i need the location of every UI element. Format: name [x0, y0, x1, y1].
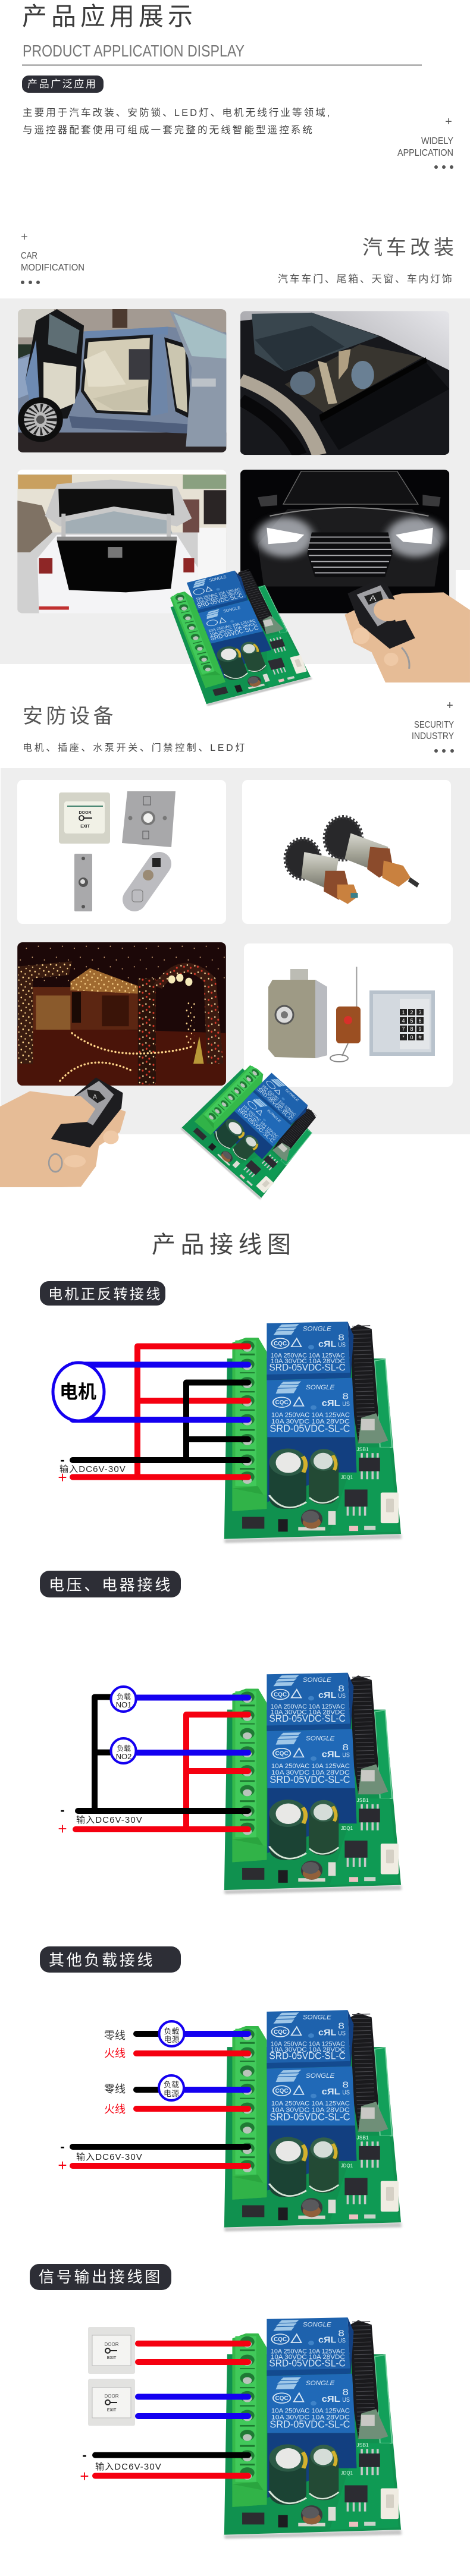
- board: SRD-05VDC-SL-C: [269, 1713, 346, 1724]
- labels: neutral and live: 零线: [104, 2083, 126, 2095]
- board: 10A 250VAC 10A 125VAC: [271, 2040, 345, 2047]
- board: 10A 250VAC 10A 125VAC: [271, 1411, 350, 1418]
- product board: section two: 10A 30VDC 10A 28VDC: [240, 1106, 277, 1141]
- wires: [76, 1697, 248, 1829]
- title: 产品应用展示: [22, 2, 197, 30]
- board: 8: [342, 1392, 349, 1401]
- board: 10A 250VAC 10A 125VAC: [271, 1702, 345, 1710]
- icon: white door exit button: [59, 792, 110, 844]
- load source 1: [159, 2021, 184, 2046]
- icon: white door exit button: DOOR: [79, 811, 92, 815]
- heading: car modification: 汽车车门、尾箱、天窗、车内灯饰: [278, 273, 453, 285]
- board: 8: [342, 1743, 349, 1752]
- icon: door exit switch 2: DOOR: [105, 2393, 119, 2399]
- board: cЯL: [318, 2027, 336, 2037]
- power input label: [58, 2139, 143, 2174]
- icon: access keypad: 1: [402, 1009, 405, 1015]
- board: [224, 2010, 402, 2231]
- board: SRD-05VDC-SL-C: [269, 2358, 346, 2369]
- board: US: [342, 2089, 350, 2096]
- photo: car trunk: [17, 470, 226, 614]
- power input label: [58, 1452, 126, 1486]
- power input label: +: [58, 1468, 67, 1486]
- power input label: +: [80, 2467, 89, 2485]
- icon: door exit switch 2: EXIT: [107, 2408, 117, 2413]
- photo: holiday lights house: [17, 942, 226, 1086]
- icon: wireless remote: [330, 967, 361, 1062]
- board: [224, 2317, 402, 2539]
- icon: door exit switch 1: [88, 2327, 135, 2374]
- load source 2: [159, 2075, 184, 2100]
- board: US: [338, 2029, 346, 2037]
- board: JSB1: [357, 1446, 369, 1452]
- board: CQC: [275, 1399, 289, 1406]
- wiring scheme: motor forward and reverse: [40, 1281, 402, 1543]
- power input label: -: [60, 1452, 65, 1467]
- board: SRD-05VDC-SL-C: [270, 2111, 350, 2123]
- power input label: 输入DC6V-30V: [76, 2152, 143, 2162]
- icon: white door exit button: EXIT: [80, 825, 90, 829]
- labels: neutral and live: 火线: [104, 2047, 126, 2059]
- wiring scheme: voltage and appliance: [40, 1571, 402, 1894]
- wires: [95, 2344, 248, 2476]
- board: JSB1: [357, 1798, 369, 1803]
- icon: access keypad: 5: [410, 1018, 413, 1024]
- pill: signal output wiring: [30, 2264, 171, 2290]
- board: US: [338, 2336, 346, 2344]
- panel: security background: [1, 768, 470, 1134]
- icon: electric lock: [268, 969, 327, 1058]
- heading: car modification: 汽车改装: [362, 237, 458, 259]
- tag: car modification: CAR: [21, 251, 37, 261]
- icon: access keypad: 6: [418, 1018, 422, 1024]
- hand holding remote: section two: A: [93, 1093, 98, 1100]
- tag: car modification: [21, 231, 84, 284]
- board: US: [342, 1751, 350, 1759]
- tag: widely application: +: [445, 115, 452, 128]
- board: CQC: [275, 2395, 289, 2402]
- board: 10A 30VDC 10A 28VDC: [271, 2413, 350, 2421]
- board: CQC: [274, 1691, 287, 1698]
- tag: widely application: APPLICATION: [397, 148, 453, 158]
- tag: security industry: SECURITY: [414, 720, 454, 730]
- pill: motor wiring: [40, 1281, 165, 1306]
- product board: section one: SONGLE: [208, 574, 227, 583]
- icon: armature back: [325, 817, 418, 887]
- text block: intro: 主要用于汽车改装、安防锁、LED灯、电机无线行业等领域,: [23, 107, 331, 118]
- product board: section one: 10A 250VAC 10A 125VAC: [195, 587, 241, 601]
- board: cЯL: [322, 1398, 340, 1408]
- hand holding remote: section one: A: [369, 595, 377, 603]
- motor symbol: 电机: [59, 1382, 96, 1402]
- board: JSB1: [357, 2442, 369, 2448]
- text block: intro: [23, 107, 331, 136]
- icon: steel exit plate: [122, 791, 176, 847]
- board: SRD-05VDC-SL-C: [269, 2050, 346, 2062]
- icon: access keypad: #: [418, 1034, 422, 1040]
- board: 10A 30VDC 10A 28VDC: [271, 2353, 345, 2360]
- board: 8: [338, 1333, 344, 1342]
- board: CQC: [275, 1750, 289, 1757]
- board: SONGLE: [303, 2320, 332, 2328]
- board: 10A 30VDC 10A 28VDC: [271, 1769, 350, 1776]
- icon: door exit switch 1: DOOR: [105, 2342, 119, 2347]
- board: [224, 1673, 402, 1894]
- board: cЯL: [318, 1339, 336, 1349]
- pill: voltage wiring: 电压、电器接线: [49, 1576, 173, 1594]
- photo: open car doors: [18, 309, 226, 452]
- board: 10A 250VAC 10A 125VAC: [271, 2347, 345, 2355]
- pill: voltage wiring: [40, 1571, 181, 1597]
- product board: section two: SRD-05VDC-SL-C: [256, 1087, 293, 1122]
- icon: oval exit button: [132, 858, 161, 902]
- card: motor armatures: [242, 780, 451, 924]
- product board: section one: 10A 250VAC 10A 125VAC: [208, 618, 256, 633]
- load NO2: NO2: [116, 1752, 131, 1761]
- board: JDQ1: [341, 1475, 353, 1480]
- pill: wide application: 产品广泛应用: [27, 78, 98, 90]
- wiring scheme: other loads: [40, 1946, 402, 2231]
- power input label: -: [60, 2139, 65, 2154]
- heading: car modification: [278, 237, 458, 285]
- labels: neutral and live: 火线: [104, 2103, 126, 2115]
- board: JSB1: [357, 2135, 369, 2141]
- power input label: +: [58, 1820, 67, 1838]
- board: US: [342, 2396, 350, 2403]
- board: SONGLE: [306, 1383, 335, 1391]
- card: door exit switches: [17, 780, 226, 924]
- icon: access keypad: *: [402, 1034, 405, 1040]
- board: cЯL: [318, 2335, 336, 2345]
- photo: car headlights: [240, 470, 449, 614]
- board: CQC: [274, 1340, 287, 1347]
- product board: section two: 10A 250VAC 10A 125VAC: [242, 1104, 280, 1138]
- tag: widely application: [397, 115, 453, 169]
- board: US: [342, 1400, 350, 1407]
- icon: door exit switch 1: EXIT: [107, 2356, 117, 2360]
- wires: [73, 2034, 248, 2166]
- load NO1: [111, 1687, 136, 1712]
- heading: wiring diagram: 产品接线图: [152, 1232, 296, 1258]
- power input label: +: [58, 2156, 67, 2174]
- product board: section one: 10A 30VDC 10A 28VDC: [209, 621, 258, 637]
- board: 10A 30VDC 10A 28VDC: [271, 1357, 345, 1364]
- product board: section two: SONGLE: [267, 1109, 282, 1124]
- board: JDQ1: [341, 2471, 353, 2476]
- board: SONGLE: [303, 1325, 332, 1332]
- board: cЯL: [322, 1750, 340, 1759]
- board: 10A 250VAC 10A 125VAC: [271, 2099, 350, 2107]
- heading: security equipment: 安防设备: [23, 705, 117, 728]
- tag: car modification: MODIFICATION: [21, 263, 84, 273]
- board: 10A 30VDC 10A 28VDC: [271, 1708, 345, 1716]
- photo: sunroof: [240, 311, 449, 455]
- pill: signal output wiring: 信号输出接线图: [39, 2268, 162, 2286]
- tag: security industry: +: [446, 699, 453, 712]
- icon: armature front: [286, 839, 358, 904]
- english subtitle: PRODUCT APPLICATION DISPLAY: [23, 42, 245, 60]
- board: SRD-05VDC-SL-C: [270, 2418, 350, 2430]
- board: cЯL: [322, 2394, 340, 2404]
- board: JDQ1: [341, 1826, 353, 1832]
- pill: motor wiring: 电机正反转接线: [48, 1287, 162, 1303]
- board: 8: [338, 1684, 344, 1693]
- product board: section one: [161, 563, 313, 706]
- product board: section two: 10A 30VDC 10A 28VDC: [259, 1086, 295, 1118]
- board: 8: [342, 2080, 349, 2090]
- hand holding remote: section two: [0, 1077, 126, 1188]
- product board: section two: SRD-05VDC-SL-C: [236, 1108, 275, 1144]
- load source 1: 负载: [164, 2027, 180, 2036]
- board: SONGLE: [303, 2013, 332, 2021]
- icon: narrow exit plate: [74, 854, 92, 911]
- board: 10A 30VDC 10A 28VDC: [271, 1417, 350, 1425]
- product board: section one: SONGLE: [223, 605, 242, 614]
- motor symbol: [53, 1363, 104, 1421]
- power input label: -: [82, 2448, 87, 2462]
- board: SONGLE: [306, 2379, 335, 2386]
- board: 10A 30VDC 10A 28VDC: [271, 2106, 350, 2113]
- wires: [73, 1346, 248, 1477]
- icon: access keypad: 8: [410, 1026, 413, 1032]
- board: CQC: [274, 2336, 287, 2343]
- product board: section one: 10A 30VDC 10A 28VDC: [196, 590, 242, 605]
- load source 2: 负载: [164, 2080, 179, 2089]
- power input label: 输入DC6V-30V: [95, 2462, 162, 2472]
- power input label: 输入DC6V-30V: [76, 1815, 143, 1825]
- heading: security equipment: [23, 705, 247, 753]
- photos: car modification: [17, 309, 449, 614]
- tag: security industry: INDUSTRY: [412, 731, 454, 741]
- board: SRD-05VDC-SL-C: [269, 1362, 346, 1373]
- product board: section two: [180, 1055, 331, 1201]
- board: SONGLE: [306, 1734, 335, 1742]
- icon: access keypad: 7: [402, 1026, 405, 1032]
- icon: access keypad: [369, 990, 435, 1056]
- load NO1: 负载: [117, 1693, 131, 1701]
- board: [224, 1322, 402, 1543]
- card: electric lock and keypad: [244, 943, 453, 1087]
- board: SRD-05VDC-SL-C: [270, 1423, 350, 1435]
- load source 1: 电源: [164, 2035, 180, 2044]
- panel: car modification background: [0, 298, 470, 664]
- board: CQC: [274, 2028, 287, 2036]
- board: 8: [338, 2329, 344, 2338]
- text block: intro: 与遥控器配套使用可组成一套完整的无线智能型遥控系统: [23, 124, 314, 136]
- tag: widely application: WIDELY: [421, 136, 453, 146]
- load source 2: 电源: [164, 2089, 179, 2098]
- tag: car modification: +: [21, 231, 28, 244]
- product board: section two: SONGLE: [284, 1088, 300, 1103]
- board: 10A 30VDC 10A 28VDC: [271, 2046, 345, 2053]
- white corner behind hand: [456, 570, 470, 664]
- board: 8: [338, 2021, 344, 2031]
- board: SONGLE: [303, 1676, 332, 1684]
- icon: access keypad: 2: [410, 1009, 413, 1015]
- power input label: [58, 1803, 143, 1838]
- icon: access keypad: 3: [418, 1009, 422, 1015]
- power input label: -: [60, 1803, 65, 1817]
- product board: section one: SRD-05VDC-SL-C: [209, 624, 259, 642]
- board: 10A 250VAC 10A 125VAC: [271, 1762, 350, 1770]
- power input label: 输入DC6V-30V: [59, 1464, 126, 1474]
- load NO2: [111, 1738, 136, 1763]
- board: CQC: [275, 2088, 289, 2094]
- pill: wide application: [22, 76, 104, 93]
- product board: section one: SRD-05VDC-SL-C: [196, 593, 245, 609]
- pill: other load wiring: [40, 1946, 181, 1973]
- board: 10A 250VAC 10A 125VAC: [271, 1351, 345, 1359]
- board: 10A 250VAC 10A 125VAC: [271, 2407, 350, 2414]
- icon: access keypad: 9: [418, 1026, 422, 1032]
- wiring scheme: signal output: [30, 2264, 402, 2539]
- icon: access keypad: 4: [402, 1018, 405, 1024]
- product board: section two: 10A 250VAC 10A 125VAC: [261, 1084, 297, 1116]
- icon: access keypad: 0: [410, 1034, 413, 1040]
- board: US: [338, 1341, 346, 1348]
- labels: neutral and live: [104, 2030, 126, 2115]
- pill: other load wiring: 其他负载接线: [49, 1951, 155, 1969]
- board: SRD-05VDC-SL-C: [270, 1774, 350, 1785]
- load NO1: NO1: [116, 1700, 131, 1709]
- tag: security industry: [412, 699, 454, 753]
- hand holding remote: section one: [344, 580, 470, 685]
- load NO2: 负载: [117, 1744, 131, 1753]
- board: cЯL: [322, 2087, 340, 2096]
- board: US: [338, 1691, 346, 1699]
- board: 8: [342, 2388, 349, 2397]
- heading: security equipment: 电机、插座、水泵开关、门禁控制、LED灯: [23, 743, 247, 753]
- heading: product application display: [22, 2, 422, 65]
- power input label: [80, 2448, 162, 2485]
- board: SONGLE: [306, 2072, 335, 2079]
- board: JDQ1: [341, 2163, 353, 2169]
- labels: neutral and live: 零线: [104, 2030, 126, 2042]
- icon: door exit switch 2: [88, 2379, 135, 2426]
- board: cЯL: [318, 1690, 336, 1700]
